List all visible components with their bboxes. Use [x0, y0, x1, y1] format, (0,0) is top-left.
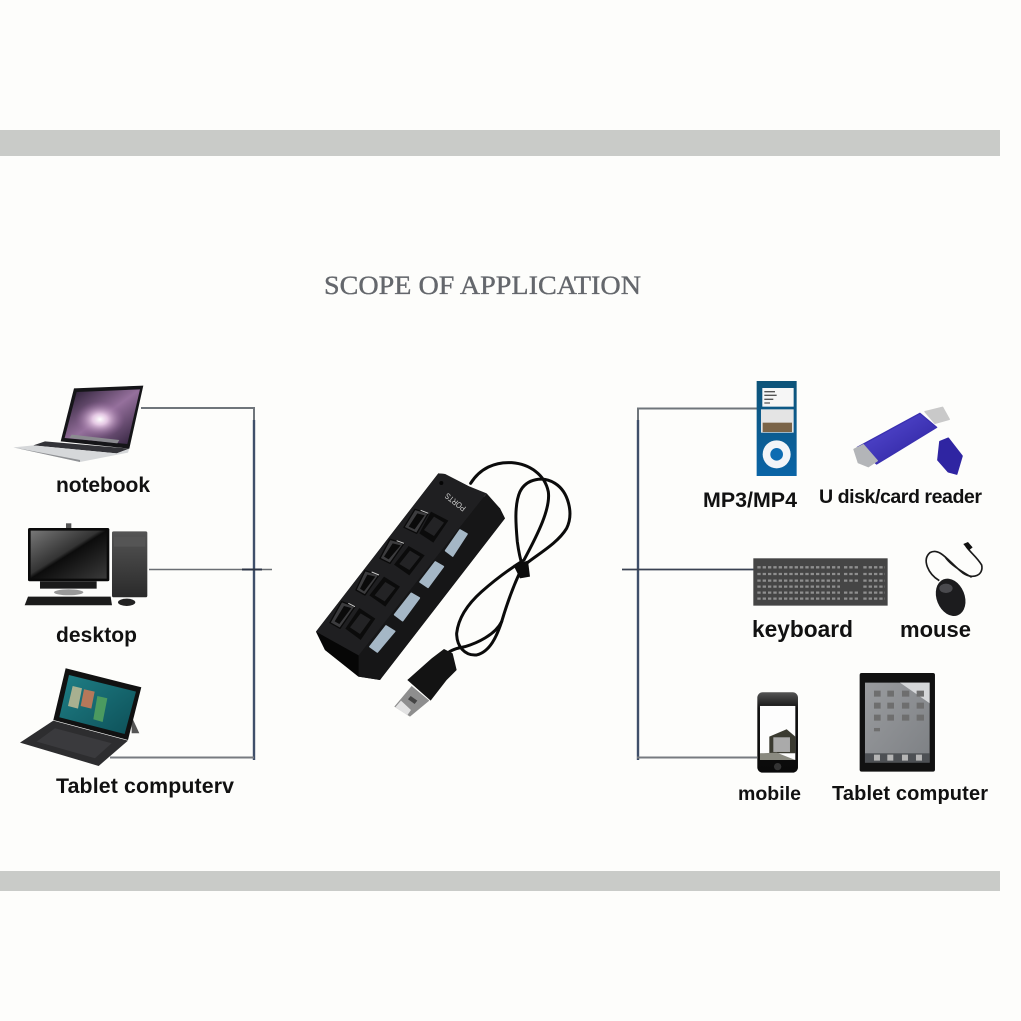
- label: MP3/MP4: MP3/MP4: [703, 488, 797, 512]
- icon: mobile phone: [757, 692, 798, 773]
- hub LED side: [359, 493, 505, 680]
- icon: desktop: [25, 523, 147, 606]
- label: desktop: desktop: [56, 624, 137, 647]
- hub brand mark: PORTS: [442, 491, 468, 514]
- label: Tablet computerv: Tablet computerv: [56, 774, 234, 798]
- top grey band: [0, 130, 1000, 156]
- USB ports: [330, 509, 428, 628]
- icon: keyboard: [753, 558, 888, 606]
- hub body: [316, 473, 505, 680]
- hub top face: [316, 473, 487, 655]
- icon: notebook: [13, 386, 143, 462]
- cable: [447, 463, 570, 655]
- icon: mouse: [926, 542, 982, 620]
- rocker switches: [345, 512, 448, 640]
- icon: MP3/MP4 player: [757, 381, 797, 476]
- hub end face: [316, 632, 359, 677]
- bottom grey band: [0, 871, 1000, 891]
- icon: tablet computer: [860, 673, 935, 772]
- label: U disk/card reader: U disk/card reader: [819, 486, 982, 508]
- right connector lines: [622, 408, 757, 760]
- LED indicators: [370, 530, 467, 652]
- label: keyboard: keyboard: [752, 616, 853, 642]
- label: Tablet computer: Tablet computer: [832, 783, 988, 805]
- left connector lines: [110, 408, 272, 760]
- USB plug: [407, 649, 457, 701]
- icon: USB flash drive: [854, 407, 962, 474]
- title: SCOPE OF APPLICATION: [324, 270, 641, 300]
- label: mouse: mouse: [900, 617, 971, 642]
- USB hub product: [316, 463, 570, 717]
- label: mobile: mobile: [738, 783, 801, 805]
- icon: tablet with keyboard: [20, 668, 141, 766]
- label: notebook: notebook: [56, 474, 150, 497]
